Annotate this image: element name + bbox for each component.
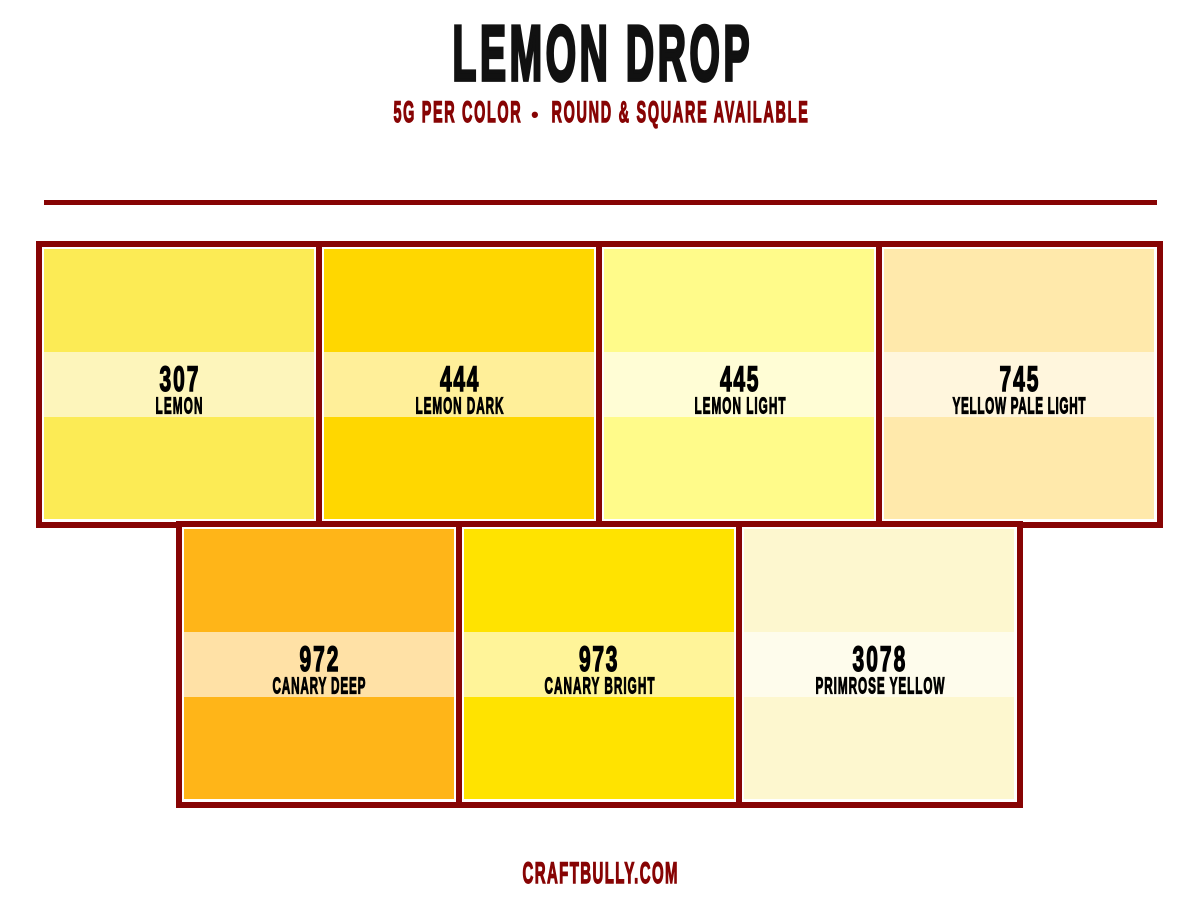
swatch: 444 Lemon Dark: LEMON DARK bbox=[416, 392, 504, 419]
swatch: 307 Lemon: 307 bbox=[160, 361, 199, 400]
swatch: 973 Canary Bright: CANARY BRIGHT bbox=[544, 672, 655, 699]
swatch: 444 Lemon Dark bbox=[319, 244, 600, 525]
swatch: 444 Lemon Dark: 444 bbox=[440, 361, 478, 400]
footer website: CRAFTBULLY.COM bbox=[522, 858, 678, 891]
subtitle bbox=[394, 95, 808, 129]
swatch: 445 Lemon Light bbox=[599, 244, 880, 525]
swatch: 307 Lemon bbox=[39, 244, 320, 525]
swatch: 445 Lemon Light: 445 bbox=[720, 361, 758, 400]
swatch: 307 Lemon: LEMON bbox=[156, 392, 202, 419]
swatch: 972 Canary Deep bbox=[179, 524, 460, 805]
swatch: 3078 Primrose Yellow: 3078 bbox=[852, 641, 905, 680]
swatch: 972 Canary Deep: 972 bbox=[300, 641, 339, 680]
swatch: 972 Canary Deep: CANARY DEEP bbox=[272, 672, 366, 699]
subtitle: ROUND & SQUARE AVAILABLE bbox=[552, 95, 808, 129]
swatch: 3078 Primrose Yellow bbox=[739, 524, 1020, 805]
swatch: 3078 Primrose Yellow: PRIMROSE YELLOW bbox=[816, 672, 945, 699]
swatch: 973 Canary Bright bbox=[459, 524, 740, 805]
swatch: 745 Yellow Pale Light: YELLOW PALE LIGHT bbox=[952, 392, 1086, 419]
swatch: 445 Lemon Light: LEMON LIGHT bbox=[694, 392, 786, 419]
subtitle: • bbox=[531, 102, 539, 127]
swatch: 745 Yellow Pale Light bbox=[879, 244, 1160, 525]
divider rule bbox=[44, 200, 1157, 205]
title: LEMON DROP bbox=[452, 11, 750, 98]
swatch: 745 Yellow Pale Light: 745 bbox=[1000, 361, 1039, 400]
swatch: 973 Canary Bright: 973 bbox=[579, 641, 617, 680]
subtitle: 5G PER COLOR bbox=[394, 95, 521, 129]
